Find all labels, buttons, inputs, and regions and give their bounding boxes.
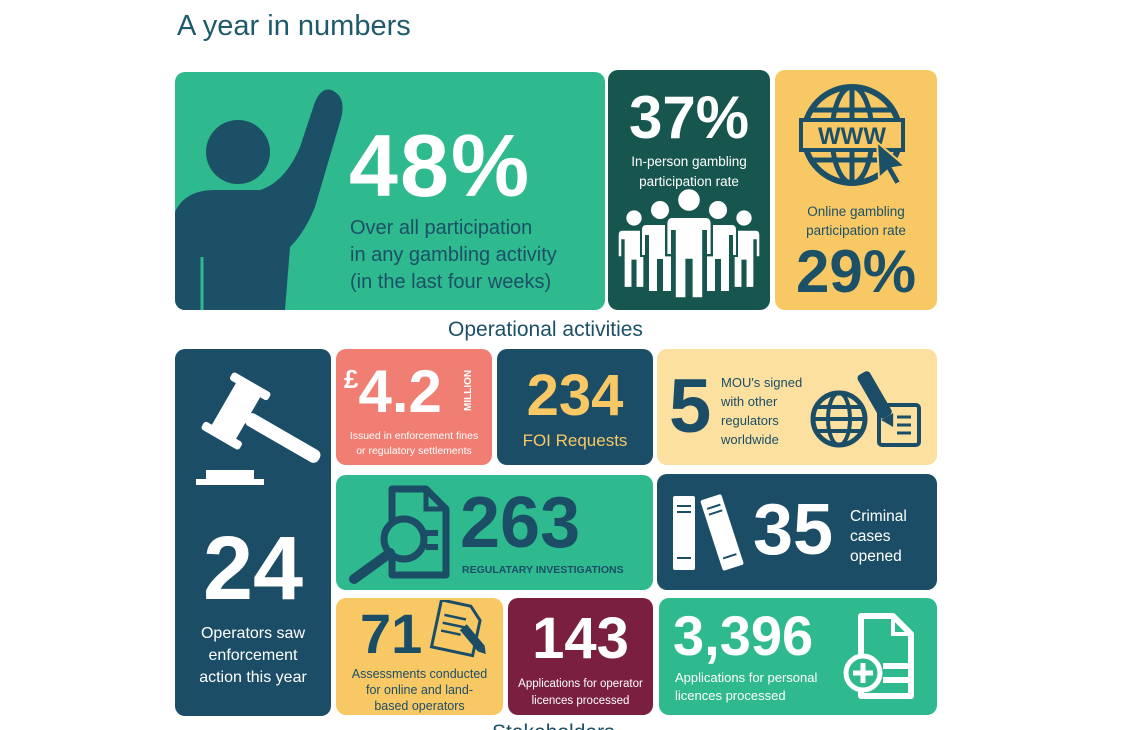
label bbox=[675, 670, 817, 703]
icon: group of people bbox=[618, 189, 760, 298]
panel: online 29% bbox=[775, 70, 937, 310]
label bbox=[850, 508, 907, 565]
panel: in-person 37% bbox=[608, 70, 770, 310]
label: participation rate bbox=[639, 174, 739, 189]
panel: 5 MOUs bbox=[657, 349, 937, 465]
title: A year in numbers bbox=[177, 10, 411, 42]
label: participation rate bbox=[806, 223, 906, 238]
label bbox=[631, 154, 747, 189]
label: opened bbox=[850, 548, 902, 565]
label: for online and land- bbox=[366, 683, 473, 697]
label bbox=[518, 678, 643, 707]
label: Criminal bbox=[850, 508, 907, 525]
description bbox=[350, 217, 557, 293]
label: FOI Requests bbox=[523, 431, 627, 450]
panel: £4.2 million fines: MILLION bbox=[463, 370, 474, 411]
number 29%: 29% bbox=[796, 238, 916, 305]
icon: document with magnifier bbox=[349, 486, 450, 584]
number 48%: 48% bbox=[349, 116, 531, 215]
number 263: 263 bbox=[460, 483, 580, 563]
number 3,396: 3,396 bbox=[673, 604, 813, 667]
panel: 35 criminal cases bbox=[657, 474, 937, 590]
number 143: 143 bbox=[532, 606, 629, 671]
label: with other bbox=[721, 394, 777, 409]
icon: document with plus bbox=[844, 613, 914, 699]
number 5: 5 bbox=[669, 364, 711, 449]
description: in any gambling activity bbox=[350, 244, 557, 266]
description: (in the last four weeks) bbox=[350, 271, 551, 293]
label: regulators bbox=[721, 413, 779, 428]
description: Over all participation bbox=[350, 217, 532, 239]
number 35: 35 bbox=[753, 490, 833, 570]
heading: operational activities: Operational activities bbox=[448, 318, 643, 341]
icon: www globe with cursor: WWW bbox=[818, 123, 886, 150]
number 71: 71 bbox=[360, 602, 422, 665]
label: Applications for personal bbox=[675, 670, 817, 685]
label: Issued in enforcement fines bbox=[350, 430, 478, 442]
number 234: 234 bbox=[527, 363, 623, 428]
label: REGULATARY INVESTIGATIONS bbox=[462, 564, 624, 576]
icon: gavel bbox=[196, 372, 320, 485]
label: In-person gambling bbox=[631, 154, 747, 169]
panel: 24 operators bbox=[175, 349, 331, 716]
panel: overall participation 48% bbox=[175, 72, 605, 310]
label bbox=[806, 204, 906, 238]
panel: 263 investigations bbox=[336, 475, 653, 590]
label: Online gambling bbox=[807, 204, 905, 219]
panel: 143 operator licences bbox=[508, 598, 653, 715]
label bbox=[199, 625, 307, 686]
label: Applications for operator bbox=[518, 678, 643, 690]
label: enforcement bbox=[209, 647, 297, 664]
panel: 71 assessments bbox=[336, 598, 503, 715]
icon: document with pen bbox=[430, 600, 486, 658]
panel: 3,396 personal licences bbox=[659, 598, 937, 715]
label bbox=[721, 375, 802, 447]
label: MOU's signed bbox=[721, 375, 802, 390]
label: Assessments conducted bbox=[352, 667, 487, 681]
label: action this year bbox=[199, 669, 307, 686]
icon: www globe with cursor bbox=[799, 84, 905, 186]
icon: globe and pen bbox=[810, 371, 921, 448]
label: licences processed bbox=[675, 688, 786, 703]
label: or regulatory settlements bbox=[356, 445, 472, 457]
number 37%: 37% bbox=[629, 84, 749, 151]
label: based operators bbox=[374, 699, 465, 713]
panel: 234 FOI bbox=[497, 349, 653, 465]
icon: person raising hand bbox=[175, 90, 343, 310]
label bbox=[352, 667, 487, 713]
icon: books bbox=[673, 494, 744, 571]
label: licences processed bbox=[532, 695, 629, 707]
label: cases bbox=[850, 528, 890, 545]
label: worldwide bbox=[721, 432, 779, 447]
panel: £4.2 million fines bbox=[336, 349, 492, 465]
label: Operators saw bbox=[201, 625, 305, 642]
number £4.2 million: £4.2 bbox=[344, 358, 442, 425]
number 24: 24 bbox=[203, 519, 303, 619]
label bbox=[350, 430, 478, 457]
